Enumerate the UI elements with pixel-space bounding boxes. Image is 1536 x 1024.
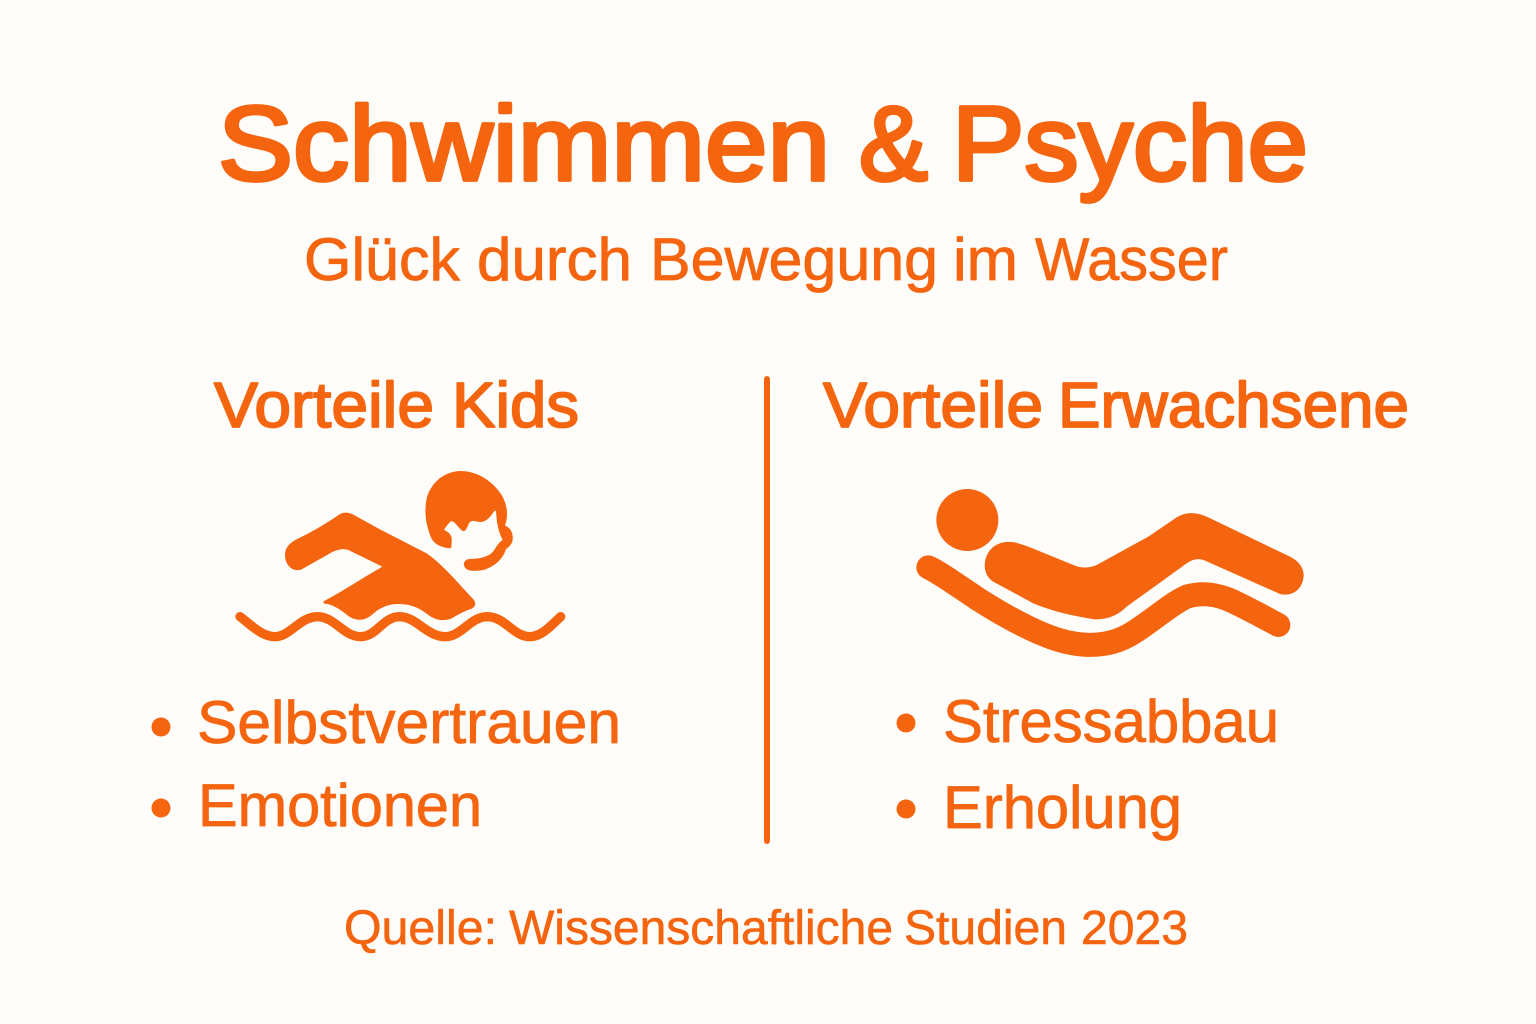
title: Psyche [952,85,1308,203]
source note: 2023 [1081,902,1188,955]
source note: Wissenschaftliche [509,902,893,955]
heading: Vorteile Erwachsene [823,369,1409,441]
bullet [896,714,916,732]
subtitle: Bewegung [650,226,938,293]
source note: Studien [904,902,1067,955]
item: Emotionen: Emotionen [198,772,482,839]
heading: Vorteile Erwachsene: Erwachsene [1058,369,1409,441]
bullet [896,800,916,818]
icon: swimming child [240,471,561,637]
divider [764,376,770,844]
bullet [152,798,170,818]
subtitle: Wasser [1035,226,1228,293]
source note: Quelle: [344,902,497,955]
icon: floating adult [928,489,1304,645]
list: adult benefits [896,688,1279,841]
heading: Vorteile Kids [214,369,579,441]
subtitle: Glück [304,226,461,293]
title [218,85,1308,203]
item: Selbstvertrauen: Selbstvertrauen [197,689,621,756]
subtitle [304,226,1228,293]
source note [344,902,1188,955]
title: & [859,85,928,203]
subtitle: durch [477,226,632,293]
item: Erholung: Erholung [943,774,1182,841]
title: Schwimmen [218,85,830,203]
bullet [152,718,170,736]
panel: adults [823,369,1409,841]
subtitle: im [953,226,1018,293]
item: Stressabbau: Stressabbau [943,688,1279,755]
panel: kids [152,369,621,839]
heading: Vorteile Kids: Vorteile [214,369,434,441]
list: kids benefits [152,689,621,839]
heading: Vorteile Erwachsene: Vorteile [823,369,1043,441]
heading: Vorteile Kids: Kids [452,369,579,441]
